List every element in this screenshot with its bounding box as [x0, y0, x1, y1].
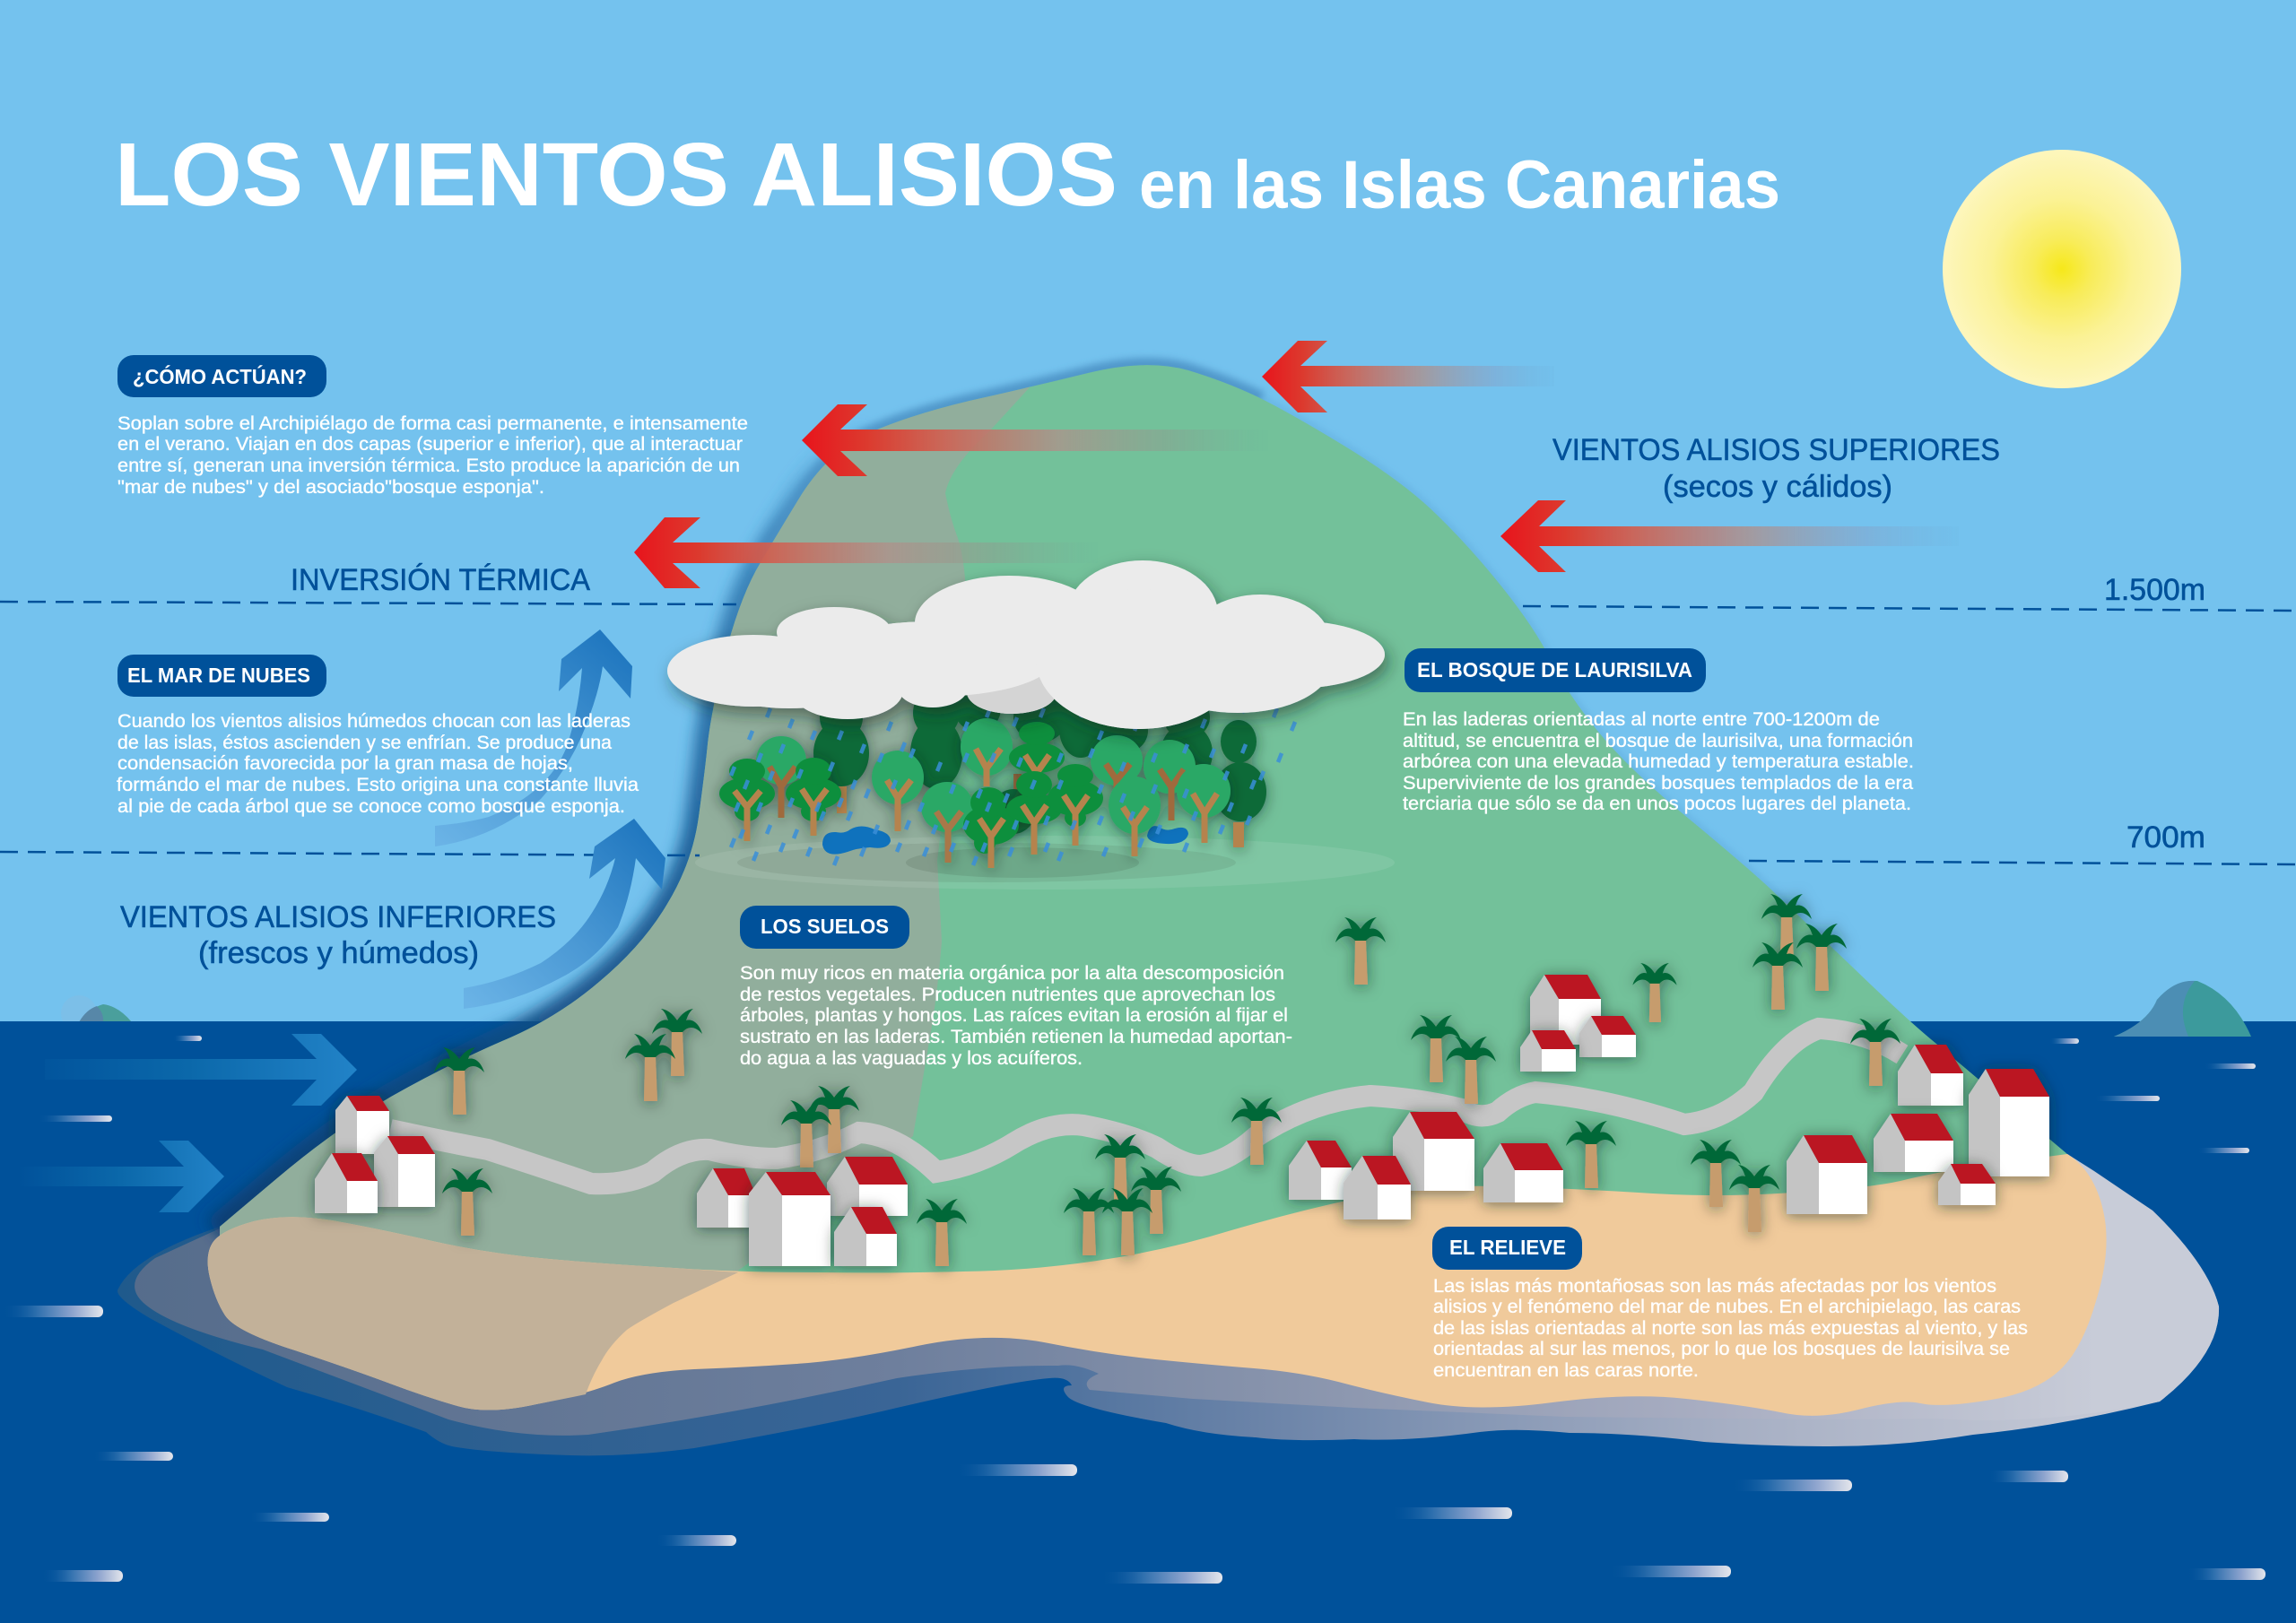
shaded sand [208, 1217, 738, 1410]
mountain (green slope) [220, 365, 2067, 1300]
body text [740, 963, 1292, 1069]
panel: el relieve [1432, 1227, 2028, 1381]
background dark trees [813, 685, 1266, 847]
sea [0, 1021, 2296, 1623]
small island left [61, 995, 132, 1031]
body text: en el verano. Viajan en dos capas (superior e inferior), que al interactuar [117, 434, 743, 455]
heading pill [117, 655, 326, 697]
body text [1433, 1276, 2028, 1381]
heading pill: EL BOSQUE DE LAURISILVA [1417, 658, 1692, 681]
village: upper right houses [1520, 975, 1636, 1072]
title: LOS VIENTOS ALISIOS [115, 125, 1118, 225]
body text: Superviviente de los grandes bosques templados de la era [1403, 773, 1913, 794]
ground shadows [695, 836, 1395, 890]
arrow: upper trade wind 4 [1500, 500, 1959, 572]
label: vientos alisios inferiores [120, 900, 556, 970]
body text: terciaria que sólo se da en unos pocos lugares del planeta. [1403, 794, 1911, 814]
body text [117, 413, 748, 498]
shaded lobe [967, 671, 1057, 714]
body text [117, 711, 639, 817]
arrow: rising lower wind lower [464, 819, 665, 1009]
label: 1.500m: 1.500m [2104, 573, 2205, 607]
panel: el bosque de laurisilva [1403, 648, 1914, 814]
body text: entre sí, generan una inversión térmica. Esto produce la aparición de un [117, 456, 740, 476]
road [390, 1028, 1902, 1184]
mountain shadow on the windward side [215, 365, 1852, 1230]
village: central houses [697, 1157, 908, 1266]
label: vientos alisios inferiores: (frescos y húmedos) [198, 936, 479, 970]
forest: bosque de laurisilva [695, 685, 1395, 890]
heading pill [1405, 648, 1706, 692]
village: lower middle houses [1289, 1112, 1563, 1219]
body text: formándo el mar de nubes. Esto origina una constante lluvia [117, 775, 639, 795]
body text: Las islas más montañosas son las más afectadas por los vientos [1433, 1276, 1996, 1297]
panel: el mar de nubes [117, 655, 639, 817]
sand coast [208, 1154, 2107, 1416]
body text: alisios y el fenómeno del mar de nubes. En el archipielago, las caras [1433, 1297, 2021, 1317]
puddles [822, 826, 1188, 855]
village: right coast houses [1787, 1045, 2049, 1214]
heading pill: ¿CÓMO ACTÚAN? [133, 364, 307, 388]
body text: árboles, plantas y hongos. Las raíces evitan la erosión al fijar el [740, 1005, 1288, 1026]
cloud: mar de nubes [667, 560, 1385, 729]
body text: En las laderas orientadas al norte entre 700-1200m de [1403, 709, 1880, 730]
icon: sun [1943, 150, 2181, 388]
Y-branch trees [719, 718, 1231, 868]
heading pill: LOS SUELOS [761, 915, 889, 938]
arrow: upper trade wind 3 [634, 517, 1098, 588]
heading pill [1432, 1227, 1582, 1270]
village: left coast houses [315, 1096, 435, 1213]
body text: sustrato en las laderas. También retienen la humedad aportan- [740, 1027, 1292, 1047]
body text [1403, 709, 1914, 814]
body text: Cuando los vientos alisios húmedos chocan con las laderas [117, 711, 631, 732]
body text: encuentran en las caras norte. [1433, 1360, 1699, 1381]
front cloud overlap [812, 589, 1242, 729]
title [115, 125, 1780, 225]
label: vientos alisios superiores: (secos y cálidos) [1663, 470, 1892, 504]
body text: orientadas al sur las menos, por lo que los bosques de laurisilva se [1433, 1339, 2010, 1359]
title: en las Islas Canarias [1139, 147, 1780, 223]
arrow: rising lower wind upper [435, 629, 632, 846]
label: inversión térmica: INVERSIÓN TÉRMICA [291, 563, 590, 597]
label: vientos alisios superiores: VIENTOS ALISIOS SUPERIORES [1552, 433, 2000, 467]
body text: "mar de nubes" y del asociado"bosque esponja". [117, 477, 544, 498]
panel: los suelos [740, 906, 1292, 1069]
cloud mass [667, 560, 1385, 729]
arrow: upper trade wind 2 [802, 404, 1268, 476]
body text: Son muy ricos en materia orgánica por la alta descomposición [740, 963, 1284, 984]
small island right [2114, 981, 2251, 1037]
shallow water halo around the island [117, 1154, 2219, 1455]
body text: Soplan sobre el Archipiélago de forma casi permanente, e intensamente [117, 413, 748, 434]
arrow: lower trade wind over sea 2 [20, 1141, 224, 1212]
body text: altitud, se encuentra el bosque de laurisilva, una formación [1403, 731, 1913, 751]
palm trees [434, 894, 1900, 1266]
label: 700m: 700m [2126, 820, 2205, 855]
body text: al pie de cada árbol que se conoce como bosque esponja. [117, 796, 625, 817]
arrow: lower trade wind over sea 1 [45, 1034, 357, 1106]
altitude dashed lines [0, 602, 2296, 864]
heading pill: EL RELIEVE [1449, 1236, 1566, 1259]
heading pill [117, 355, 326, 397]
body text: condensación favorecida por la gran masa de hojas, [117, 753, 573, 774]
body text: arbórea con una elevada humedad y temperatura estable. [1403, 751, 1914, 772]
heading pill [740, 906, 909, 949]
body text: de las islas orientadas al norte son las más expuestas al viento, y las [1433, 1318, 2028, 1339]
panel: cómo actúan [117, 355, 748, 498]
body text: de restos vegetales. Producen nutrientes que aprovechan los [740, 985, 1275, 1005]
label: vientos alisios superiores [1552, 433, 2000, 504]
arrow: upper trade wind 1 [1262, 341, 1554, 412]
shaded windward slope [220, 387, 1030, 1271]
label: vientos alisios inferiores: VIENTOS ALISIOS INFERIORES [120, 900, 556, 934]
heading pill: EL MAR DE NUBES [127, 664, 310, 687]
sea wave streaks [2, 1036, 2266, 1584]
body text: de las islas, éstos ascienden y se enfrían. Se produce una [117, 733, 612, 753]
rain drops [731, 704, 1295, 865]
body text: do agua a las vaguadas y los acuíferos. [740, 1048, 1083, 1069]
